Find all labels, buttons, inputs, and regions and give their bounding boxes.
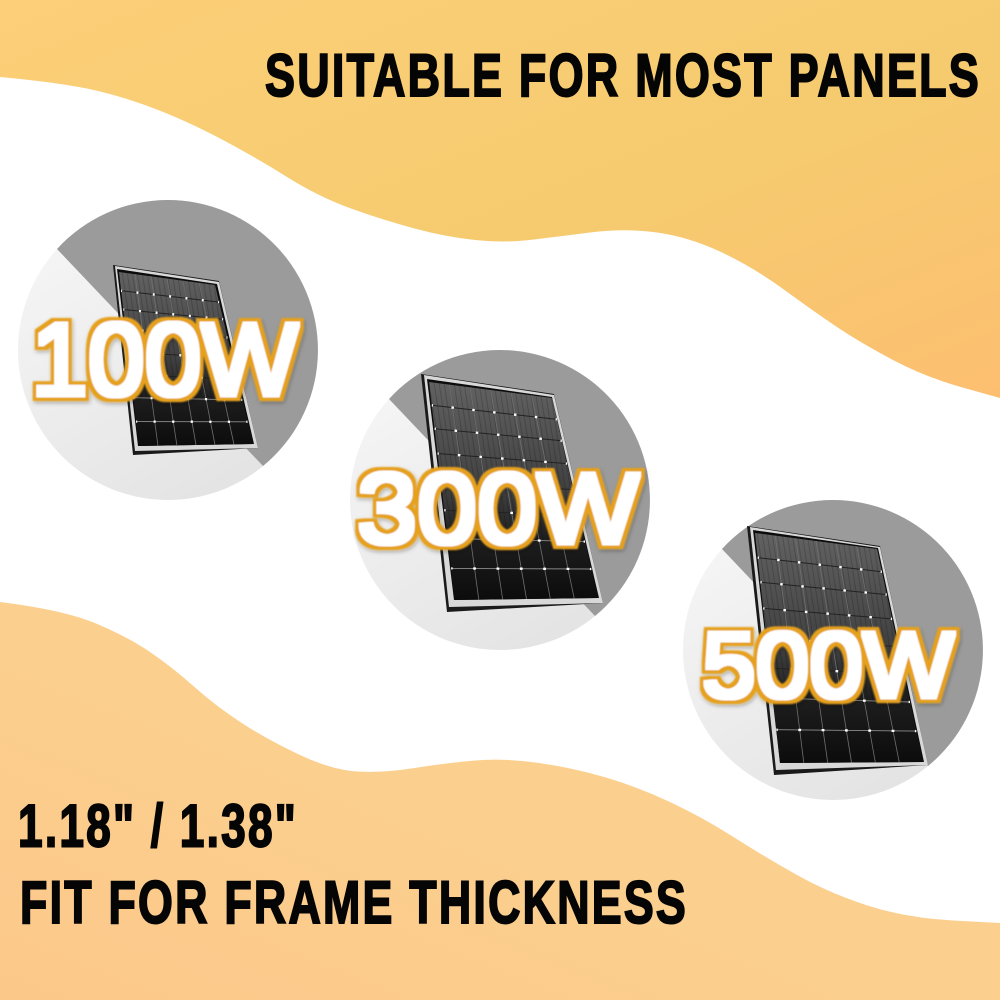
circle dark segment <box>722 500 983 766</box>
panel: 500W badge <box>683 500 983 800</box>
icon: solar panel 300W <box>421 374 603 612</box>
icon: solar panel 500W <box>747 526 928 775</box>
circle dark segment <box>389 350 650 616</box>
circle light background <box>18 200 318 500</box>
circle light background <box>350 350 650 650</box>
text: fit for frame thickness: FIT FOR FRAME THICKNESS <box>20 869 688 936</box>
top wave background <box>0 0 1000 398</box>
circle light background <box>683 500 983 800</box>
bottom wave background <box>0 602 1000 1000</box>
panel: 300W badge <box>350 350 650 650</box>
panel: 100W badge <box>18 200 318 500</box>
label: 500W: 500W <box>702 613 954 717</box>
text: frame thickness sizes: 1.18" / 1.38" <box>18 792 298 860</box>
icon: solar panel 100W <box>113 265 258 455</box>
label: 100W: 100W <box>31 302 298 417</box>
circle dark segment <box>57 200 318 466</box>
label: 300W: 300W <box>357 453 640 565</box>
